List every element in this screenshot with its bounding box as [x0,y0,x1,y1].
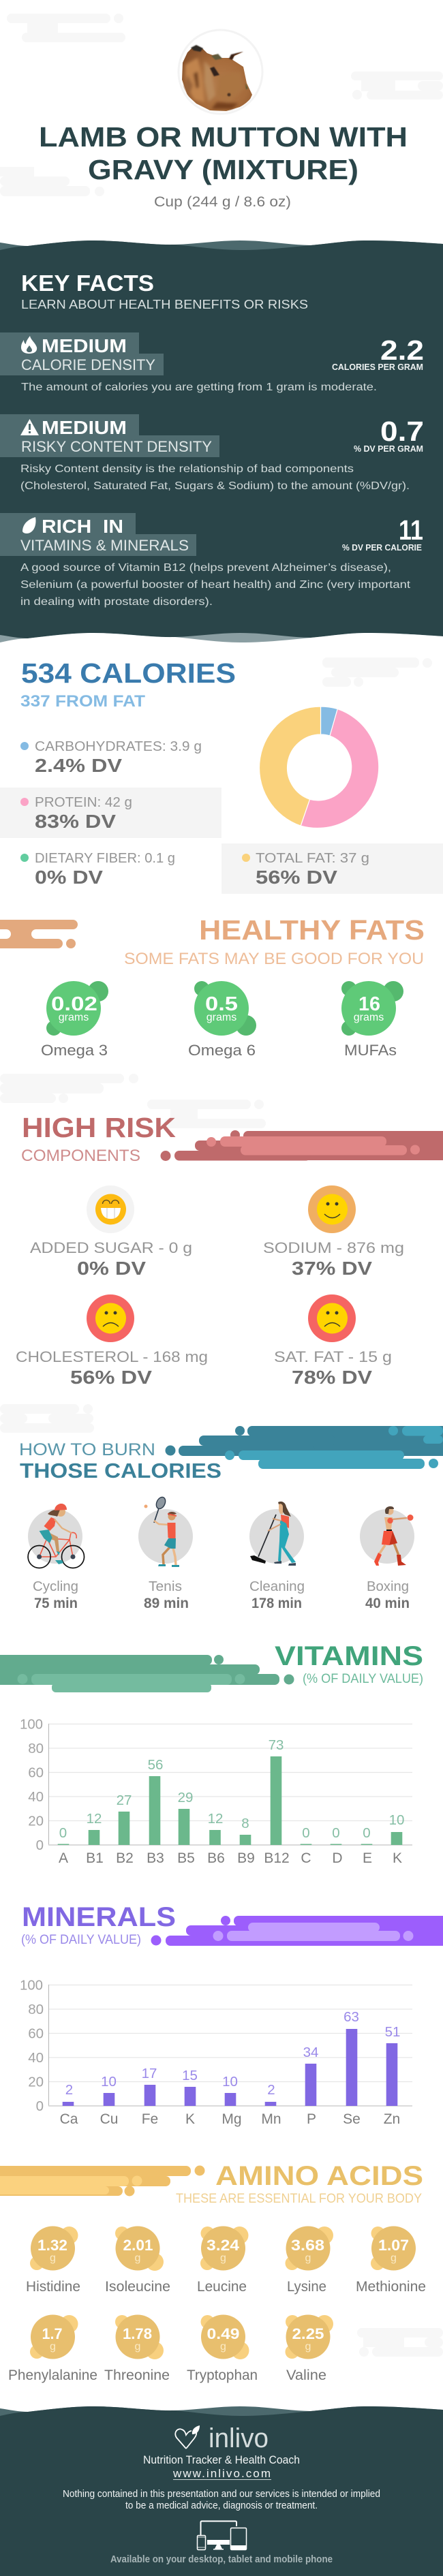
bar chart: minerals: 15 [182,2068,198,2083]
heading: healthy fats: HEALTHY FATS [199,914,425,946]
bar chart: vitamins: 0 [36,1837,44,1853]
bar chart: minerals: 2 [267,2082,275,2098]
risk: saturated fat: 78% DV [292,1367,372,1388]
panel: healthy fats [0,914,425,1059]
stat: MUFAs [341,981,403,1059]
bar chart: minerals: K [185,2111,195,2127]
subheading: daily value: (% OF DAILY VALUE) [303,1672,423,1686]
amino acid: isoleucine: Isoleucine [105,2279,170,2295]
stat: MUFAs: grams [354,1012,384,1023]
bar chart: minerals: 40 [28,2050,44,2066]
fact: calorie density: CALORIE DENSITY [21,356,155,373]
bar chart: minerals: 0 [36,2098,44,2114]
decorative bar: healthy fats [0,920,78,948]
amino acid: lysine: 3.68 [291,2237,324,2254]
fact: risky content density: Risky Content density is the relationship of bad components [20,463,354,475]
amino acid: lysine: Lysine [287,2279,326,2295]
bar chart: minerals: 10 [222,2074,238,2090]
fact: rich in vitamins and minerals: VITAMINS & MINERALS [20,537,189,554]
fact: risky content density: MEDIUM [42,417,127,438]
fact: risky content density [0,414,424,492]
stat: omega 6: Omega 6 [188,1042,256,1059]
decorative bar: vitamins [0,1655,294,1692]
bar chart: minerals: 63 [343,2009,359,2025]
legend: protein [0,788,222,838]
risk: sodium [263,1185,404,1279]
risk: cholesterol [16,1294,208,1388]
amino acid: isoleucine [105,2226,170,2295]
bar chart: vitamins: B5 [177,1850,195,1866]
fact: rich in vitamins and minerals: RICH IN [42,516,123,537]
heading: minerals: MINERALS [22,1902,176,1932]
disclaimer [63,2489,380,2511]
amino acid: methionine: 1.07 [378,2237,409,2254]
amino acid: threonine: 1.78 [123,2325,152,2342]
bar chart: minerals: 2 [65,2082,73,2098]
bar chart: vitamins: 80 [28,1741,44,1756]
website link: www.inlivo.com [172,2467,271,2480]
activity: boxing: 40 min [365,1596,410,1611]
amino acid: threonine [104,2315,170,2383]
activity: cycling [28,1504,85,1611]
amino acid: histidine: g [50,2252,56,2264]
icon: devices [198,2521,247,2549]
heading: high risk: HIGH RISK [22,1112,176,1143]
amino acid: methionine: g [391,2252,397,2264]
fact: rich in vitamins and minerals: 11 [399,514,423,546]
risk: sodium: SODIUM - 876 mg [263,1239,404,1256]
title: LAMB OR MUTTON WITH [39,121,408,153]
disclaimer: Nothing contained in this presentation and our services is intended or implied [63,2489,380,2500]
availability note: Available on your desktop, tablet and mobile phone [110,2554,333,2565]
risk: sodium: 37% DV [292,1258,372,1279]
amino acid: lysine: g [305,2252,311,2264]
amino acid: leucine: Leucine [197,2279,247,2295]
legend: protein: 83% DV [35,811,116,832]
bar chart: vitamins: B6 [207,1850,225,1866]
activity: tennis [138,1495,193,1611]
bar chart: minerals: 17 [142,2066,157,2081]
bar chart: minerals: Mg [222,2111,242,2127]
stat: omega 3 [41,981,108,1059]
panel: minerals [20,1902,443,2127]
amino acid: methionine [356,2226,426,2295]
bar chart: vitamins: B12 [264,1850,290,1866]
amino acid: lysine [285,2226,333,2295]
bar chart: vitamins: K [393,1850,402,1866]
amino acid: valine [285,2315,333,2383]
heading: calories: 534 CALORIES [21,657,236,689]
bar chart: vitamins: 0 [363,1825,371,1841]
legend: total fat [222,843,443,894]
fact: calorie density: MEDIUM [42,335,127,356]
bar chart: vitamins: 60 [28,1765,44,1781]
bar chart: vitamins: 12 [208,1811,223,1827]
amino acid: valine: Valine [286,2368,326,2383]
amino acid: phenylalanine: 1.7 [42,2325,63,2342]
fact: risky content density: % DV PER GRAM [354,444,423,454]
icon: warning triangle [20,419,39,435]
amino acid: leucine [197,2226,248,2295]
fact: risky content density: RISKY CONTENT DENSITY [21,438,212,455]
fact: rich in vitamins and minerals: Selenium (a powerful booster of heart health) and Zinc (very important [20,579,411,591]
fact: rich in vitamins and minerals: % DV PER CALORIE [342,543,422,553]
bar chart: minerals: 10 [101,2074,117,2090]
bar chart: minerals [20,1977,412,2127]
fact: risky content density: (Cholesterol, Saturated Fat, Sugars & Sodium) to the amount (%DV/gr). [20,480,410,492]
heading: those calories: THOSE CALORIES [20,1459,222,1483]
bar chart: vitamins: B3 [147,1850,164,1866]
legend: dietary fiber: 0% DV [35,867,103,888]
activity: tennis: 89 min [144,1596,189,1611]
activity: cleaning: 178 min [251,1596,302,1611]
panel: footer [0,2406,443,2576]
fact: risky content density: 0.7 [380,416,424,447]
amino acid: leucine: g [220,2252,226,2264]
legend: dietary fiber: DIETARY FIBER: 0.1 g [35,851,175,866]
bar chart: vitamins: B1 [86,1850,104,1866]
legend: total fat: 56% DV [256,867,337,888]
stat: omega 6 [188,981,256,1059]
heading: key facts: KEY FACTS [21,270,154,296]
icon: leaf [22,517,35,533]
stat: omega 3: Omega 3 [41,1042,108,1059]
fact: rich in vitamins and minerals [0,513,423,608]
risk: saturated fat: SAT. FAT - 15 g [274,1348,392,1365]
heading: how to burn: HOW TO BURN [19,1440,155,1459]
disclaimer: to be a medical advice, diagnosis or treatment. [125,2500,318,2511]
bar chart: vitamins: 20 [28,1814,44,1829]
icon: flame [21,336,37,354]
title: GRAVY (MIXTURE) [88,154,358,185]
activity: boxing [360,1506,414,1611]
bar chart: vitamins [20,1717,412,1866]
panel: vitamins [0,1641,423,1866]
bar chart: vitamins: 10 [389,1812,404,1828]
risk: added sugar: 0% DV [77,1258,146,1279]
bar chart: minerals: Ca [60,2111,78,2127]
amino acid: valine: g [305,2341,311,2353]
legend: protein: PROTEIN: 42 g [35,795,132,810]
bar chart: minerals: P [307,2111,316,2127]
legend: carbohydrates: CARBOHYDRATES: 3.9 g [35,739,202,754]
decorative bar: amino acids [0,2165,204,2197]
panel: amino acids [0,2161,426,2383]
fact: calorie density: The amount of calories you are getting from 1 gram is moderate. [21,382,377,393]
decorative bar: high risk [161,1130,443,1161]
bar chart: minerals: 60 [28,2026,44,2041]
amino acid: histidine: Histidine [26,2279,80,2295]
bar chart: vitamins: E [363,1850,372,1866]
stat: MUFAs: MUFAs [344,1042,397,1059]
risk: added sugar: ADDED SUGAR - 0 g [30,1239,192,1256]
bar chart: vitamins: A [59,1850,68,1866]
decorative bar: minerals [151,1916,443,1946]
bar chart: minerals: Cu [100,2111,118,2127]
bar chart: minerals: Fe [142,2111,158,2127]
subheading: from fat: 337 FROM FAT [20,692,145,711]
bar chart: vitamins: 100 [20,1717,43,1732]
logo: inlivo [175,2423,269,2453]
legend: total fat: TOTAL FAT: 37 g [256,851,369,866]
bar chart: minerals: 100 [20,1977,43,1993]
amino acid: valine: 2.25 [292,2325,324,2342]
subheading: components: COMPONENTS [21,1147,140,1165]
legend: dietary fiber [20,851,175,888]
activity: cleaning [249,1502,305,1611]
tagline: Nutrition Tracker & Health Coach [143,2453,300,2466]
risk: cholesterol: CHOLESTEROL - 168 mg [16,1348,208,1365]
activity: boxing: Boxing [367,1579,409,1594]
legend: carbohydrates: 2.4% DV [35,755,122,776]
bar chart: minerals: Se [343,2111,361,2127]
bar chart: minerals: 20 [28,2074,44,2090]
legend: carbohydrates [20,739,202,776]
amino acid: phenylalanine: g [50,2341,56,2353]
amino acid: isoleucine: 2.01 [123,2237,153,2254]
bar chart: vitamins: 0 [59,1825,67,1841]
panel: calories [0,657,443,894]
bar chart: vitamins: 0 [332,1825,340,1841]
bar chart: vitamins: B2 [116,1850,134,1866]
bar chart: vitamins: 56 [148,1757,163,1773]
bar chart: vitamins: C [301,1850,311,1866]
stat: omega 6: grams [207,1012,236,1023]
bar chart: vitamins: 29 [178,1790,193,1805]
fact: calorie density: 2.2 [380,335,424,366]
panel: how to burn those calories [19,1426,443,1611]
activity: tennis: Tenis [149,1579,182,1594]
bar chart: vitamins: 73 [269,1737,284,1753]
decorative bar: burn [165,1426,443,1469]
activity: cleaning: Cleaning [249,1579,305,1594]
subtitle: serving size: Cup (244 g / 8.6 oz) [154,194,291,210]
subheading: daily value: (% OF DAILY VALUE) [21,1933,141,1947]
bar chart: minerals: 51 [385,2024,400,2040]
bar chart: minerals: 80 [28,2002,44,2017]
amino acid: methionine: Methionine [356,2279,426,2295]
bar chart: vitamins: D [332,1850,343,1866]
amino acid: histidine [26,2226,80,2295]
amino acid: tryptophan: g [220,2341,226,2353]
risk: cholesterol: 56% DV [70,1367,152,1388]
stat: omega 6: 0.5 [205,993,238,1015]
risk: saturated fat [274,1294,392,1388]
amino acid: tryptophan [187,2315,258,2383]
amino acid: tryptophan: 0.49 [207,2325,240,2342]
title [39,121,408,185]
bar chart: vitamins: B9 [237,1850,255,1866]
fact: rich in vitamins and minerals: in dealing with prostate disorders). [20,596,213,608]
activity: cycling: 75 min [34,1596,78,1611]
donut chart [259,707,379,828]
heading: vitamins: VITAMINS [275,1641,423,1671]
amino acid: phenylalanine: Phenylalanine [8,2368,97,2383]
amino acid: threonine: Threonine [104,2368,170,2383]
amino acid: phenylalanine [8,2315,97,2383]
risk: added sugar [30,1185,192,1279]
subheading: key facts: LEARN ABOUT HEALTH BENEFITS OR RISKS [21,297,308,311]
panel: key facts [0,240,443,647]
heading: amino acids: AMINO ACIDS [215,2161,423,2191]
fact: calorie density: CALORIES PER GRAM [332,362,423,372]
header: food photo [179,30,262,114]
amino acid: histidine: 1.32 [37,2237,67,2254]
fact: calorie density [0,332,424,393]
fact: rich in vitamins and minerals: A good source of Vitamin B12 (helps prevent Alzheimer’s disease), [20,562,391,574]
bar chart: minerals: Mn [261,2111,281,2127]
bar chart: minerals: Zn [384,2111,400,2127]
bar chart: vitamins: 0 [302,1825,310,1841]
panel: high risk [16,1112,443,1388]
activity: cycling: Cycling [33,1579,78,1594]
amino acid: leucine: 3.24 [207,2237,240,2254]
bar chart: vitamins: 8 [241,1816,249,1831]
bar chart: vitamins: 27 [117,1793,132,1808]
stat: omega 3: grams [59,1012,89,1023]
amino acid: tryptophan: Tryptophan [187,2368,258,2383]
subheading: healthy fats: SOME FATS MAY BE GOOD FOR YOU [124,950,424,968]
stat: MUFAs: 16 [358,993,380,1015]
bar chart: minerals: 34 [303,2045,318,2060]
amino acid: isoleucine: g [135,2252,140,2264]
bar chart: vitamins: 40 [28,1789,44,1805]
logo: inlivo: inlivo [209,2423,269,2453]
amino acid: threonine: g [135,2341,140,2353]
stat: omega 3: 0.02 [51,993,97,1015]
bar chart: vitamins: 12 [87,1811,102,1827]
subheading: amino acids: THESE ARE ESSENTIAL FOR YOUR BODY [176,2192,422,2206]
